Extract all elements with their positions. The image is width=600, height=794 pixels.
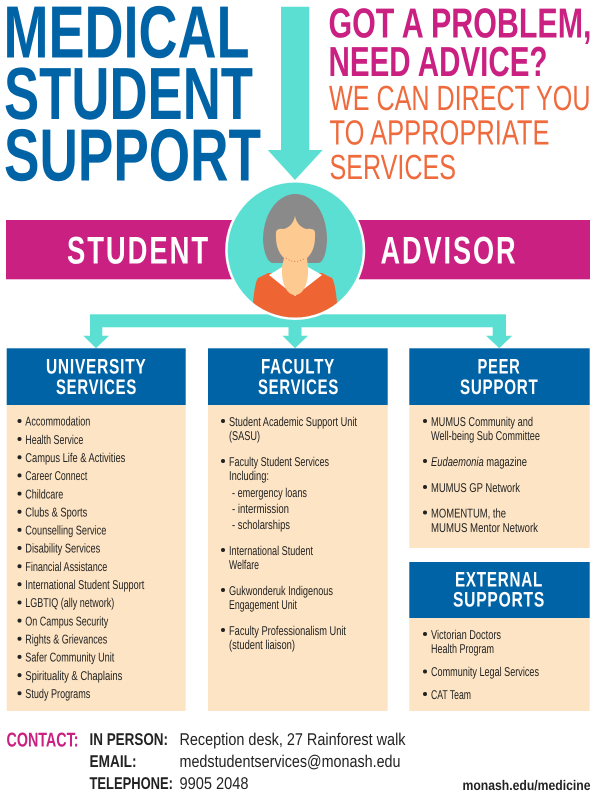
- list: university services: Health Service: [25, 432, 83, 447]
- list: faculty services: Including:: [229, 468, 269, 483]
- heading: external supports: [453, 569, 545, 612]
- banner: student advisor: [6, 220, 590, 279]
- list: university services: Spirituality & Chaplains: [25, 668, 122, 683]
- list: university services: On Campus Security: [25, 613, 109, 628]
- contact details: 9905 2048: [180, 774, 248, 793]
- list: university services: Financial Assistance: [25, 559, 107, 574]
- list: university services: Study Programs: [25, 686, 90, 701]
- contact details: [6, 730, 406, 793]
- list: university services: Counselling Service: [25, 523, 106, 538]
- list: faculty services: Engagement Unit: [229, 597, 297, 612]
- list: external supports: Victorian Doctors: [431, 627, 501, 642]
- list: faculty services: - scholarships: [232, 517, 290, 532]
- list: faculty services: Gukwonderuk Indigenous: [229, 583, 333, 598]
- list: peer support: MUMUS Community and: [431, 414, 533, 429]
- icon: student advisor portrait: [225, 180, 365, 330]
- panel: external supports: [409, 562, 590, 711]
- list: university services: Career Connect: [25, 468, 88, 483]
- list: external supports: Health Program: [431, 641, 494, 656]
- contact details: Reception desk, 27 Rainforest walk: [180, 730, 406, 749]
- list: peer support: MUMUS GP Network: [431, 480, 520, 495]
- list: external supports: CAT Team: [431, 687, 471, 702]
- list: university services: Childcare: [25, 486, 63, 501]
- banner: student advisor: ADVISOR: [380, 229, 518, 272]
- list: university services: LGBTIQ (ally network): [25, 595, 114, 610]
- list: external supports: [423, 627, 539, 702]
- list: faculty services: Faculty Professionalism Unit: [229, 623, 346, 638]
- tagline: [328, 0, 592, 187]
- list: faculty services: (student liaison): [229, 637, 295, 652]
- list: faculty services: Faculty Student Services: [229, 454, 329, 469]
- list: faculty services: - intermission: [232, 501, 289, 516]
- contact details: medstudentservices@monash.edu: [180, 752, 400, 771]
- list: peer support: Eudaemonia magazine: [431, 454, 527, 469]
- heading: university services: [46, 356, 146, 399]
- list: faculty services: (SASU): [229, 428, 260, 443]
- list: faculty services: - emergency loans: [232, 485, 307, 500]
- list: university services: Accommodation: [25, 414, 90, 429]
- list: peer support: [423, 414, 540, 535]
- list: external supports: Community Legal Services: [431, 664, 539, 679]
- list: peer support: MOMENTUM, the: [431, 506, 506, 520]
- contact details: IN PERSON:: [90, 730, 168, 749]
- list: university services: Disability Services: [25, 541, 100, 556]
- list: faculty services: Student Academic Support Unit: [229, 414, 357, 429]
- panel: peer support: [409, 348, 590, 548]
- list: university services: Safer Community Unit: [25, 650, 115, 665]
- title: STUDENT: [4, 52, 253, 135]
- tagline: SERVICES: [330, 148, 456, 187]
- list: faculty services: [221, 414, 357, 652]
- contact details: CONTACT:: [6, 730, 78, 752]
- title: [4, 0, 261, 196]
- contact details: EMAIL:: [90, 752, 136, 771]
- heading: faculty services: FACULTY: [261, 356, 335, 378]
- heading: peer support: SUPPORT: [460, 376, 538, 399]
- title: SUPPORT: [4, 114, 261, 196]
- arrow: down to advisor: [268, 7, 323, 180]
- list: peer support: MUMUS Mentor Network: [431, 520, 538, 535]
- panel: university services: [7, 348, 186, 711]
- heading: peer support: PEER: [478, 356, 520, 378]
- heading: peer support: [460, 356, 538, 399]
- list: university services: Rights & Grievances: [25, 632, 107, 646]
- list: peer support: Well-being Sub Committee: [431, 428, 540, 443]
- heading: external supports: SUPPORTS: [453, 589, 545, 612]
- list: university services: [18, 414, 145, 701]
- list: faculty services: Welfare: [229, 557, 259, 572]
- list: university services: Clubs & Sports: [25, 504, 87, 519]
- list: university services: Campus Life & Activities: [25, 450, 125, 465]
- panel: faculty services: [208, 348, 388, 711]
- list: university services: International Student Support: [25, 577, 145, 592]
- heading: university services: UNIVERSITY: [46, 356, 146, 378]
- heading: external supports: EXTERNAL: [455, 569, 543, 592]
- heading: faculty services: [258, 356, 339, 399]
- banner: student advisor: STUDENT: [67, 229, 210, 272]
- heading: university services: SERVICES: [56, 376, 137, 399]
- contact details: TELEPHONE:: [90, 774, 173, 793]
- connector arrows: [83, 314, 512, 348]
- list: faculty services: International Student: [229, 543, 313, 558]
- heading: faculty services: SERVICES: [258, 376, 339, 399]
